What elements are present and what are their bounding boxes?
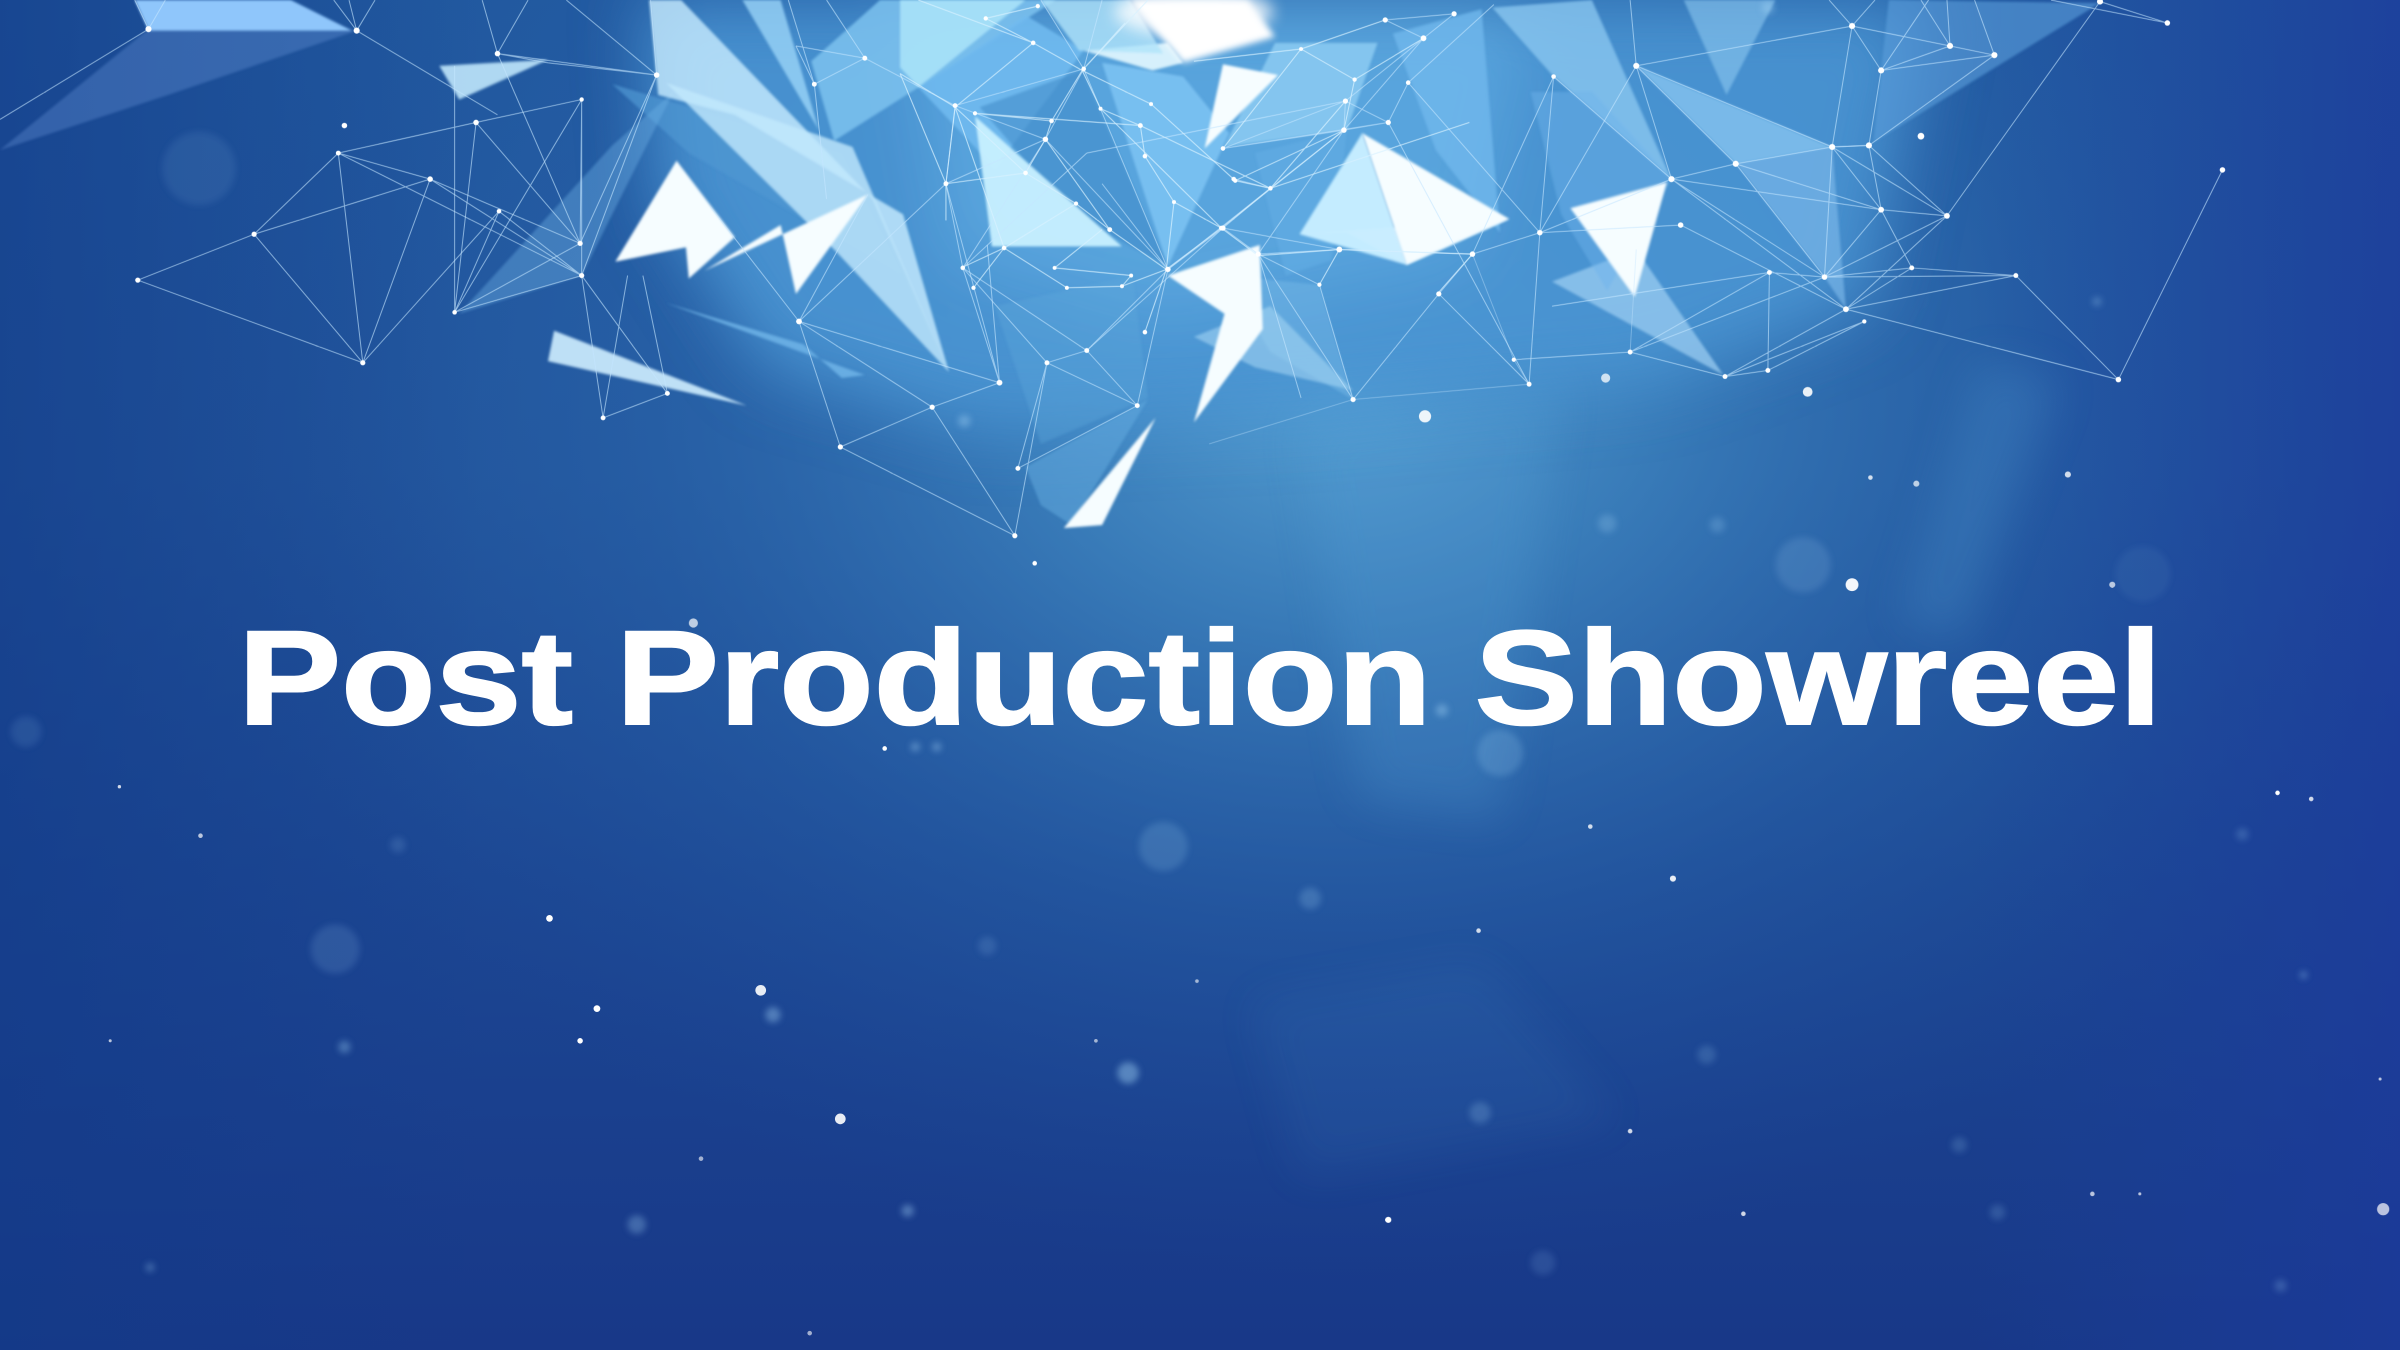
title: Post Production Showreel xyxy=(238,604,2162,753)
plexus network nodes xyxy=(135,0,2225,538)
plexus network lines xyxy=(0,0,2222,536)
white light flare xyxy=(1130,0,1275,63)
translucent polygon shards xyxy=(0,0,2100,528)
light cloud behind network xyxy=(643,0,1929,429)
central network lines xyxy=(900,0,1472,332)
white glowing shards xyxy=(615,64,1667,528)
pale cyan shards xyxy=(439,0,1509,406)
